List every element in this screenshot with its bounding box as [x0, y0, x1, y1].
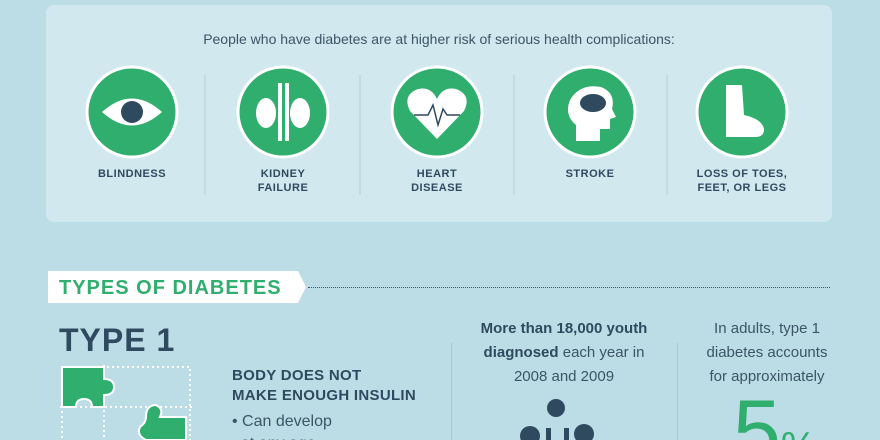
puzzle graphic	[60, 365, 192, 440]
stat: adults text: In adults, type 1	[714, 320, 820, 337]
label: foot: FEET, OR LEGS	[697, 182, 786, 194]
bullet	[232, 413, 332, 440]
label: blindness: BLINDNESS	[98, 168, 166, 180]
icon: stroke head	[545, 67, 635, 157]
label: foot	[697, 168, 787, 194]
panel: complications	[46, 5, 832, 222]
stat: adults text: for approximately	[709, 368, 825, 385]
icon: eye	[87, 67, 177, 157]
stat: adults text	[707, 320, 827, 385]
heading: type 1: TYPE 1	[59, 322, 175, 358]
stat: youth: More than 18,000 youth	[481, 320, 647, 337]
label: kidney: FAILURE	[258, 182, 308, 194]
intro text: People who have diabetes are at higher risk of serious health complications:	[203, 31, 675, 47]
stat: adults text: diabetes accounts	[707, 344, 827, 361]
label: kidney	[258, 168, 308, 194]
label: foot: LOSS OF TOES,	[697, 168, 787, 180]
section banner	[48, 271, 306, 303]
bullet: • Can develop	[232, 413, 332, 430]
stat: youth: 2008 and 2009	[514, 368, 614, 385]
icon: foot	[697, 67, 787, 157]
icons	[86, 66, 788, 195]
label: heart: HEART	[417, 168, 457, 180]
stat: youth	[481, 320, 647, 385]
text: body does not make insulin: BODY DOES NOT	[232, 367, 361, 384]
label: stroke: STROKE	[566, 168, 614, 180]
icon: kidney	[238, 67, 328, 157]
icon: kids	[520, 399, 594, 440]
icon: heart	[392, 67, 482, 157]
text: body does not make insulin	[232, 367, 416, 404]
section banner: TYPES OF DIABETES	[59, 277, 282, 299]
label: kidney: KIDNEY	[261, 168, 305, 180]
text: body does not make insulin: MAKE ENOUGH INSULIN	[232, 387, 416, 404]
label: heart	[411, 168, 463, 194]
stat: youth: diagnosed each year in	[484, 344, 644, 361]
label: heart: DISEASE	[411, 182, 463, 194]
